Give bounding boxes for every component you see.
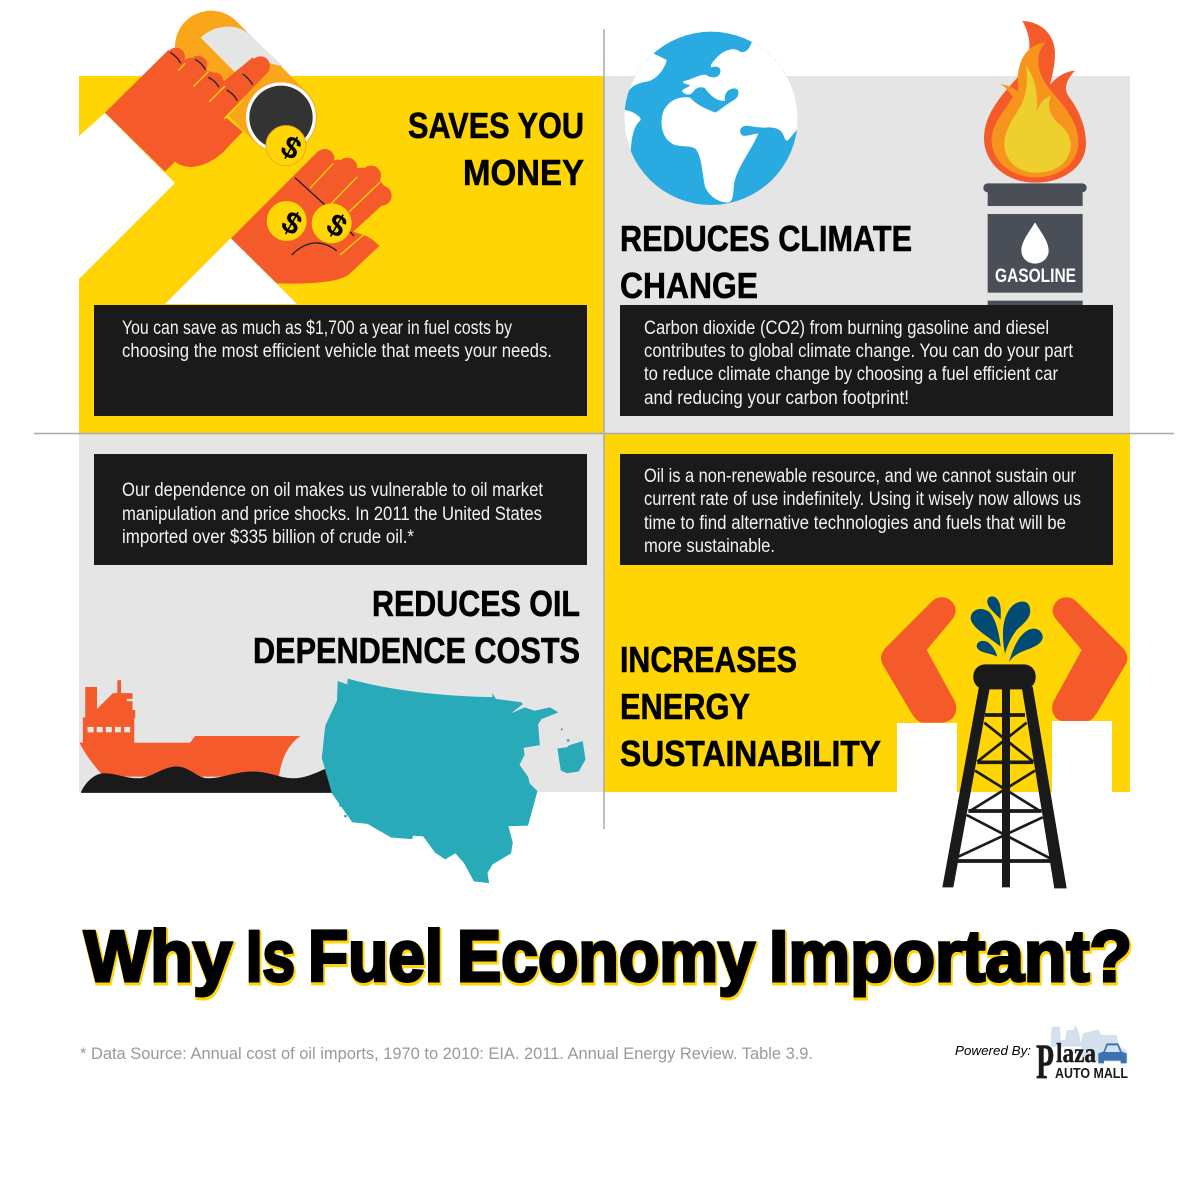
heading: reduces oil dependence costs bbox=[253, 583, 580, 671]
panel: saves you money bbox=[78, 76, 604, 433]
text box: reduces climate change: Carbon dioxide (CO2) from burning gasoline and diesel bbox=[644, 318, 1049, 339]
icon: flame bbox=[984, 21, 1086, 183]
logo: Plaza Auto Mall: laza bbox=[1056, 1038, 1096, 1068]
text box: saves you money: choosing the most efficient vehicle that meets your needs. bbox=[122, 341, 552, 362]
text box: reduces climate change: contributes to global climate change. You can do your part bbox=[644, 341, 1074, 362]
logo: Plaza Auto Mall: AUTO MALL bbox=[1055, 1065, 1128, 1082]
heading: increases energy sustainability: ENERGY bbox=[620, 686, 750, 727]
text box: energy sustainability: time to find alternative technologies and fuels that will be bbox=[644, 513, 1066, 534]
text box: reduces climate change bbox=[620, 305, 1113, 416]
icon: oil tanker on waves bbox=[79, 680, 334, 793]
icon: upper hand bbox=[105, 48, 270, 172]
panel: reduces oil dependence costs bbox=[79, 434, 604, 792]
icon: oil gusher drops bbox=[971, 596, 1043, 662]
powered by label: Powered By: bbox=[955, 1043, 1031, 1058]
text box: reduces climate change: and reducing your carbon footprint! bbox=[644, 388, 909, 409]
icon: orange chevrons bbox=[881, 597, 1127, 723]
text box: oil dependence bbox=[94, 454, 587, 565]
title: Economy bbox=[457, 917, 755, 997]
panel: reduces climate change bbox=[604, 76, 1130, 433]
heading: reduces oil dependence costs: DEPENDENCE COSTS bbox=[253, 630, 580, 671]
icon: map of the United States bbox=[322, 679, 585, 883]
icon: globe bbox=[624, 32, 798, 205]
icon: hands pouring coins from a can bbox=[105, 27, 392, 284]
title: Why bbox=[84, 917, 232, 997]
text box: reduces climate change: to reduce climate change by choosing a fuel efficient car bbox=[644, 364, 1059, 385]
data source footnote: * Data Source: Annual cost of oil imports, 1970 to 2010: EIA. 2011. Annual Energy Review. Table 3.9. bbox=[80, 1044, 813, 1063]
title: Fuel bbox=[309, 919, 444, 999]
heading: saves you money bbox=[408, 105, 584, 193]
title: Fuel bbox=[308, 917, 443, 997]
heading: saves you money: MONEY bbox=[463, 152, 584, 193]
icon: lower hand with coins: $ bbox=[321, 207, 353, 245]
icon: lower hand with coins: $ bbox=[276, 204, 308, 242]
logo: Plaza Auto Mall bbox=[1036, 1025, 1128, 1089]
icon: lower hand with coins bbox=[231, 149, 392, 284]
title bbox=[84, 917, 1133, 999]
heading: saves you money: SAVES YOU bbox=[408, 105, 584, 146]
heading: increases energy sustainability bbox=[620, 639, 881, 774]
title: Important? bbox=[770, 919, 1133, 999]
white blocks behind derrick bbox=[897, 721, 1112, 792]
icon: oil derrick with gusher bbox=[942, 596, 1067, 888]
text box: oil dependence: manipulation and price shocks. In 2011 the United States bbox=[122, 504, 542, 525]
text box: energy sustainability: Oil is a non-renewable resource, and we cannot sustain our bbox=[644, 466, 1077, 487]
title: Why bbox=[85, 919, 233, 999]
heading: reduces climate change bbox=[620, 218, 912, 306]
title: Is bbox=[247, 919, 296, 999]
icon: derrick tower bbox=[942, 664, 1067, 888]
text box: saves you money: You can save as much as $1,700 a year in fuel costs by bbox=[122, 318, 512, 339]
text box: energy sustainability bbox=[620, 454, 1113, 565]
title: Important? bbox=[769, 917, 1132, 997]
icon: falling coin: $ bbox=[275, 129, 307, 167]
title: Economy bbox=[458, 919, 756, 999]
icon: gasoline barrel: GASOLINE bbox=[995, 266, 1076, 287]
icon: can bbox=[201, 27, 316, 152]
heading: reduces climate change: REDUCES CLIMATE bbox=[620, 218, 912, 259]
logo skyline and car bbox=[1051, 1025, 1127, 1063]
icon: gasoline barrel bbox=[983, 183, 1087, 307]
heading: increases energy sustainability: SUSTAINABILITY bbox=[620, 733, 881, 774]
text box: energy sustainability: more sustainable. bbox=[644, 536, 775, 557]
text box: oil dependence: imported over $335 billion of crude oil.* bbox=[122, 527, 415, 548]
text box: oil dependence: Our dependence on oil makes us vulnerable to oil market bbox=[122, 480, 544, 501]
heading: reduces oil dependence costs: REDUCES OIL bbox=[372, 583, 580, 624]
title: Is bbox=[246, 917, 295, 997]
text box: saves you money bbox=[94, 305, 587, 416]
logo: Plaza Auto Mall: P bbox=[1036, 1033, 1054, 1089]
panel: increases energy sustainability bbox=[604, 434, 1130, 792]
heading: reduces climate change: CHANGE bbox=[620, 265, 758, 306]
text box: energy sustainability: current rate of use indefinitely. Using it wisely now allows us bbox=[644, 489, 1081, 510]
heading: increases energy sustainability: INCREASES bbox=[620, 639, 797, 680]
